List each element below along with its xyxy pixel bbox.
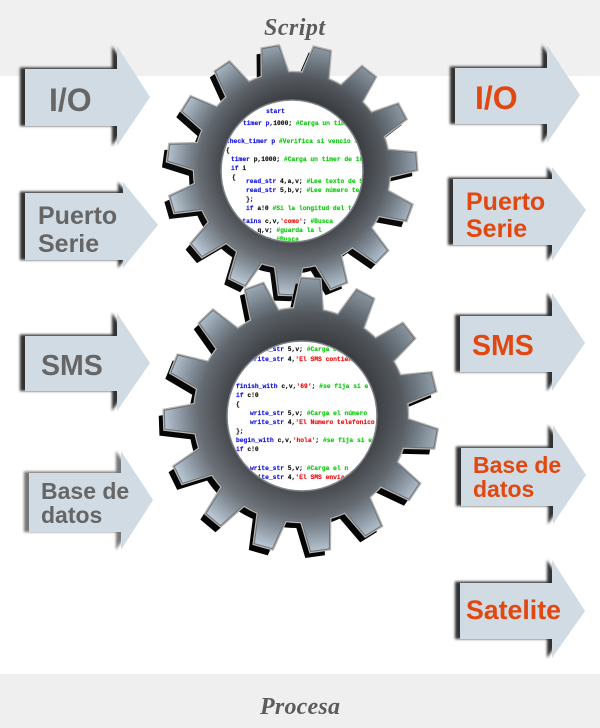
output arrow: SMS (455, 293, 585, 391)
code listing: bottom gear: }; (236, 428, 244, 435)
input arrow: SMS: SMS (41, 350, 103, 382)
output arrow: I/O: I/O (475, 80, 518, 116)
code listing: top gear: contains c,v,'como'; #Busca (231, 218, 333, 225)
code listing: bottom gear: write_str 4,'El SMS contiene (250, 356, 356, 363)
code listing: bottom gear: write_str 4,'El SMS enviado (250, 474, 352, 481)
code listing: bottom gear: write_str 5,v; #Carga el (250, 346, 341, 353)
output arrow: SMS: SMS (472, 330, 534, 362)
code listing: top gear: { (232, 174, 236, 181)
code listing: top gear: strlen q,v; #guarda la l (231, 227, 322, 234)
output arrow: Base de datos: datos (473, 476, 534, 502)
code listing: top gear: read_str 5,b,v; #Lee número tel (246, 187, 363, 194)
output arrow: Base de datos: Base de (473, 452, 561, 478)
output arrow: Puerto Serie: Puerto (466, 188, 545, 216)
code listing: bottom gear: { (236, 401, 240, 408)
code listing: bottom gear: write_str 5,v; #Carga el n (250, 465, 348, 472)
code listing: top gear: { (226, 147, 230, 154)
output arrow: Satelite (455, 560, 585, 658)
output arrow: Base de datos (456, 425, 586, 524)
bottom gear: Procesa (160, 275, 441, 558)
code listing: bottom gear: if c!0 (236, 392, 259, 399)
code listing: top gear: check_timer p #Verifica si vencio el (226, 138, 362, 145)
code listing: bottom gear: if c!0 (236, 446, 259, 453)
input arrow: Base de datos: datos (41, 502, 102, 528)
code listing: top gear (226, 108, 371, 243)
code listing: top gear: timer p,1000; #Carga un timer (243, 120, 353, 127)
input arrow: Base de datos: Base de (41, 478, 129, 504)
output arrow: Satelite: Satelite (466, 595, 561, 625)
code listing: top gear: }; (246, 196, 254, 203)
input arrow: SMS (20, 313, 150, 411)
input arrow: I/O (20, 46, 150, 146)
code listing: bottom gear: begin_with c,v,'hola'; #se fija si el (236, 437, 376, 444)
input arrow: I/O: I/O (49, 82, 92, 118)
code listing: top gear: if a!0 #Si la longitud del te (246, 205, 356, 212)
code listing: top gear: copy v; #Busca (246, 236, 299, 243)
output arrow: Puerto Serie (448, 167, 586, 261)
header band (0, 0, 600, 76)
code listing: bottom gear: write_str 4,'El Numero telefonico (250, 419, 375, 426)
output arrow: I/O (450, 45, 580, 143)
heading: Procesa: Procesa (259, 694, 340, 720)
code listing: bottom gear: finish_with c,v,'69'; #se fija si e (236, 383, 369, 390)
code listing: top gear: read_str 4,a,v; #Lee texto de SMS (246, 178, 371, 185)
input arrow: Puerto Serie: Puerto (38, 202, 117, 230)
code listing: bottom gear: write_str 5,v; #Carga el número (250, 410, 367, 417)
output arrow: Puerto Serie: Serie (466, 215, 527, 243)
code listing: top gear: if i (231, 165, 246, 172)
input arrow: Puerto Serie: Serie (38, 230, 99, 258)
code listing: bottom gear (236, 346, 376, 481)
top gear: Script (162, 42, 420, 300)
code listing: top gear: start (266, 108, 285, 115)
input arrow: Puerto Serie (20, 182, 158, 268)
footer band (0, 674, 600, 728)
input arrow: Base de datos (24, 451, 153, 550)
code listing: top gear: timer p,1000; #Carga un timer de 10 (231, 156, 363, 163)
heading: Script: Script (264, 15, 326, 41)
